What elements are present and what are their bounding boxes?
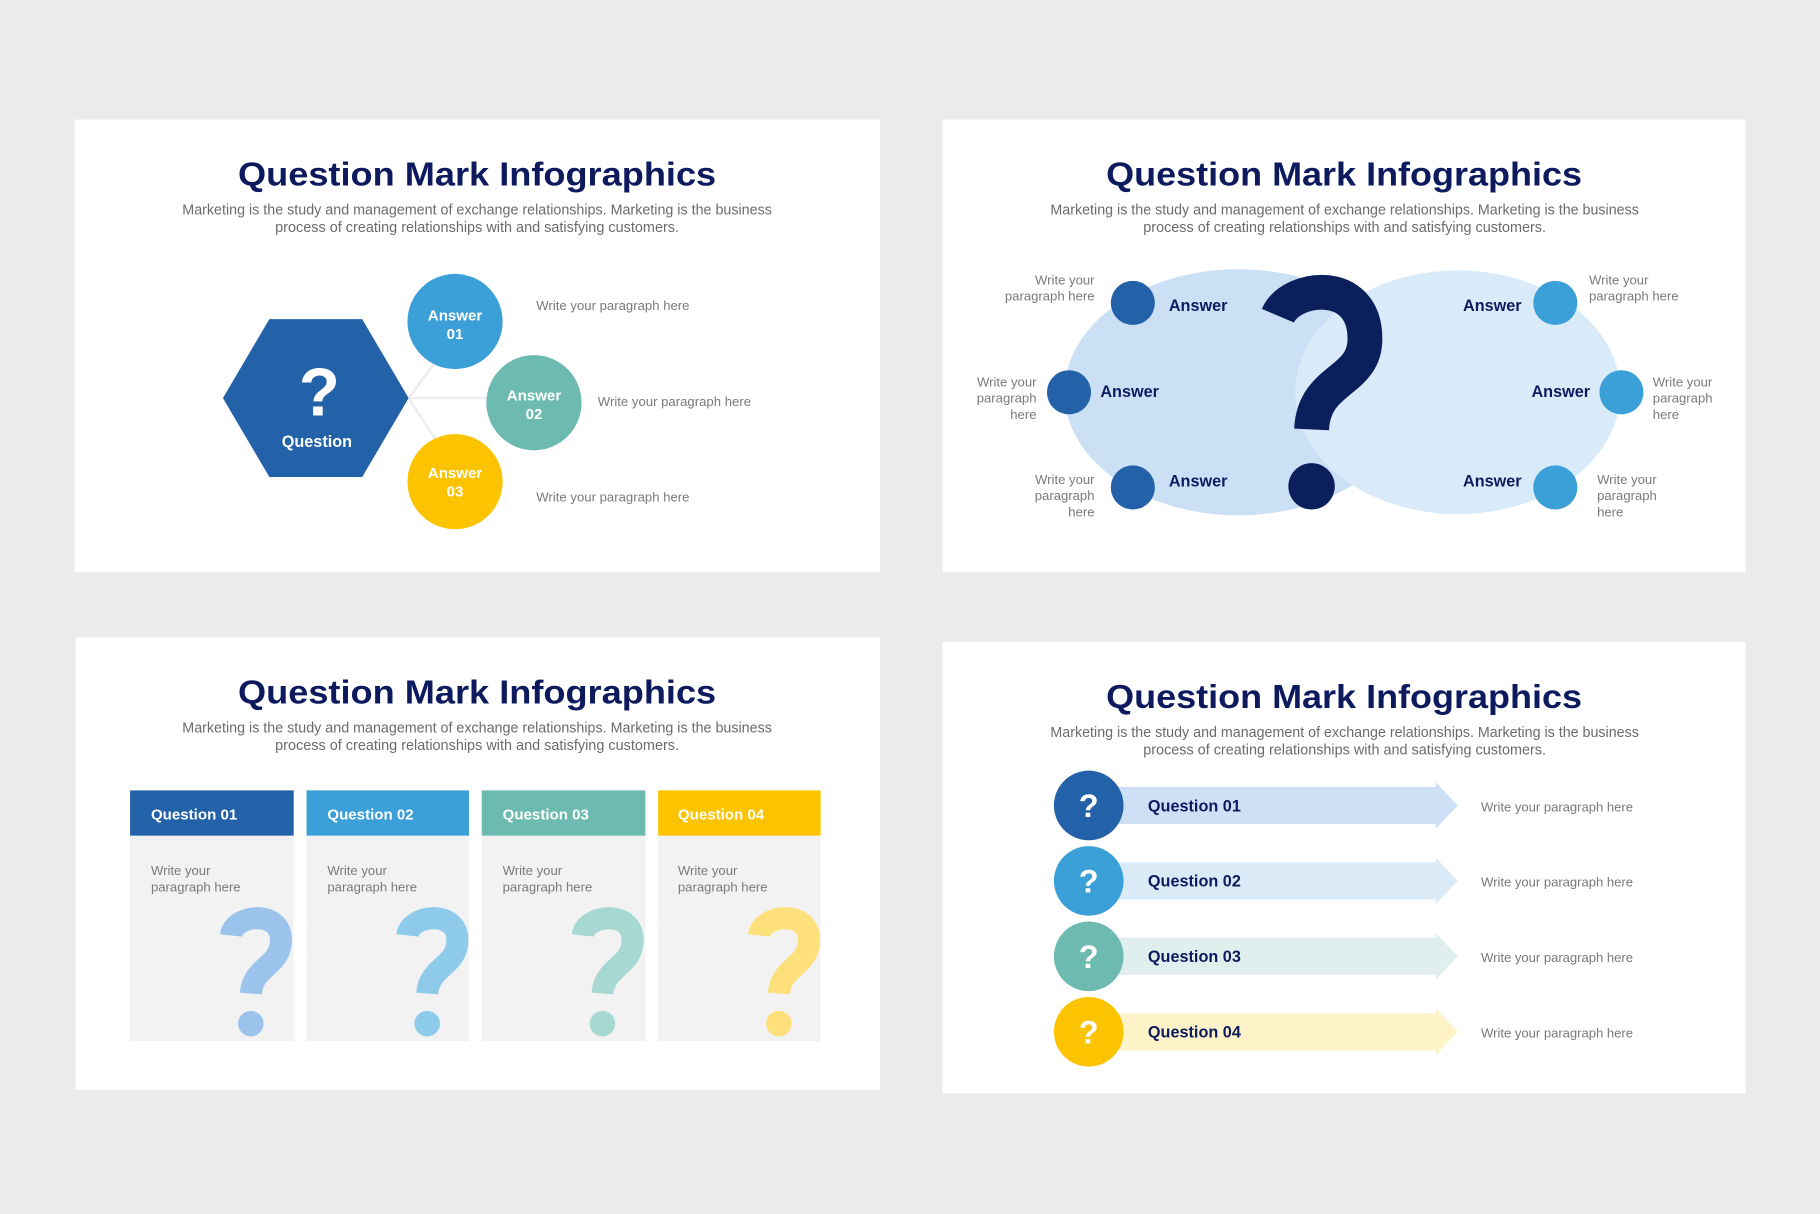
right answers: Write your bbox=[1597, 472, 1657, 487]
column: question 04: paragraph here bbox=[678, 879, 768, 894]
column: question 01: paragraph here bbox=[151, 879, 241, 894]
subtitle bbox=[1050, 725, 1639, 758]
circle: answer 03: 03 bbox=[447, 484, 463, 501]
subtitle: Marketing is the study and management of exchange relationships. Marketing is the business bbox=[182, 203, 772, 219]
row: question 02: ? bbox=[1079, 864, 1099, 900]
right answers: here bbox=[1653, 407, 1679, 422]
right answers: here bbox=[1597, 504, 1623, 519]
right answers: Write your bbox=[1589, 272, 1649, 287]
column: question 03: paragraph here bbox=[503, 879, 592, 894]
column: question 01: Write your bbox=[151, 863, 211, 878]
column: question 04 bbox=[658, 790, 821, 1041]
left answers bbox=[977, 272, 1228, 519]
circle: answer 01: 01 bbox=[447, 326, 463, 343]
row: question 04 bbox=[1054, 997, 1633, 1067]
left answers: here bbox=[1068, 504, 1095, 519]
subtitle: Marketing is the study and management of exchange relationships. Marketing is the business bbox=[182, 720, 772, 736]
left answers: Answer bbox=[1169, 472, 1228, 490]
panel: question arrows bbox=[942, 642, 1746, 1093]
right answers bbox=[1463, 272, 1713, 519]
left answers: paragraph here bbox=[1005, 289, 1095, 304]
circle: answer 03: Answer bbox=[428, 465, 482, 482]
circle: answer 03 bbox=[407, 434, 503, 529]
column: question 02: Write your bbox=[327, 863, 387, 878]
row: question 03: Write your paragraph here bbox=[1481, 950, 1633, 965]
answer paragraphs: Write your paragraph here bbox=[536, 298, 689, 313]
panel: hexagon question bbox=[74, 120, 880, 572]
column: question 02: Question 02 bbox=[327, 806, 414, 823]
circle: answer 02 bbox=[486, 355, 582, 450]
title: Question Mark Infographics bbox=[238, 157, 716, 194]
answer paragraphs bbox=[536, 298, 751, 504]
hexagon: question bbox=[223, 319, 409, 477]
right answers: Write your bbox=[1653, 374, 1713, 389]
column: question 04: Question 04 bbox=[678, 806, 765, 823]
column: question 04: Write your bbox=[678, 863, 738, 878]
right answers: Answer bbox=[1463, 297, 1522, 315]
subtitle bbox=[1050, 203, 1639, 236]
right answers: Answer bbox=[1531, 383, 1591, 401]
row: question 04: Write your paragraph here bbox=[1481, 1026, 1633, 1041]
subtitle bbox=[182, 720, 772, 754]
left answers: Answer bbox=[1169, 297, 1228, 315]
title: Question Mark Infographics bbox=[238, 674, 716, 711]
row: question 03 bbox=[1054, 922, 1633, 991]
connector lines bbox=[409, 362, 488, 439]
column: question 02 bbox=[306, 790, 469, 1041]
hexagon: question: ? bbox=[299, 355, 340, 430]
subtitle: process of creating relationships with and satisfying customers. bbox=[1143, 742, 1546, 758]
row: question 02 bbox=[1054, 846, 1633, 916]
row: question 01 bbox=[1054, 771, 1633, 840]
answer paragraphs: Write your paragraph here bbox=[598, 394, 751, 409]
left answers: Write your bbox=[1035, 472, 1095, 487]
subtitle: process of creating relationships with and satisfying customers. bbox=[1143, 220, 1546, 236]
row: question 03: ? bbox=[1079, 939, 1099, 975]
subtitle: Marketing is the study and management of exchange relationships. Marketing is the business bbox=[1050, 725, 1639, 741]
subtitle: process of creating relationships with and satisfying customers. bbox=[275, 738, 679, 754]
subtitle bbox=[182, 203, 772, 236]
panel: venn question bbox=[942, 120, 1746, 572]
row: question 02: Question 02 bbox=[1148, 873, 1241, 891]
column: question 01 bbox=[130, 790, 294, 1041]
row: question 01: ? bbox=[1079, 788, 1099, 824]
right answers: paragraph bbox=[1597, 488, 1657, 503]
column: question 01: Question 01 bbox=[151, 806, 237, 823]
ellipses bbox=[1064, 269, 1620, 515]
icon: big question mark bbox=[1278, 292, 1365, 510]
circle: answer 01: Answer bbox=[428, 307, 482, 324]
row: question 04: ? bbox=[1079, 1014, 1099, 1050]
left answers: here bbox=[1010, 407, 1037, 422]
circle: answer 02: Answer bbox=[507, 387, 561, 404]
right answers: paragraph bbox=[1653, 391, 1713, 406]
title: Question Mark Infographics bbox=[1106, 157, 1582, 194]
answer paragraphs: Write your paragraph here bbox=[536, 489, 689, 504]
row: question 01: Write your paragraph here bbox=[1481, 799, 1633, 814]
circle: answer 01 bbox=[407, 274, 503, 369]
column: question 03: Write your bbox=[503, 863, 563, 878]
circle: answer 02: 02 bbox=[526, 406, 542, 423]
subtitle: process of creating relationships with and satisfying customers. bbox=[275, 220, 679, 236]
hexagon: question: Question bbox=[282, 433, 352, 451]
left answers: Answer bbox=[1100, 383, 1160, 401]
row: question 04: Question 04 bbox=[1148, 1024, 1241, 1042]
panel: question columns bbox=[76, 637, 880, 1090]
title: Question Mark Infographics bbox=[1106, 679, 1582, 716]
subtitle: Marketing is the study and management of exchange relationships. Marketing is the business bbox=[1050, 203, 1639, 219]
left answers: paragraph bbox=[977, 391, 1037, 406]
left answers: Write your bbox=[1035, 272, 1095, 287]
left answers: Write your bbox=[977, 374, 1037, 389]
right answers: paragraph here bbox=[1589, 289, 1679, 304]
right answers: Answer bbox=[1463, 472, 1522, 490]
column: question 02: paragraph here bbox=[327, 879, 417, 894]
column: question 03: Question 03 bbox=[503, 806, 589, 823]
row: question 03: Question 03 bbox=[1148, 948, 1241, 966]
column: question 03 bbox=[482, 790, 645, 1041]
left answers: paragraph bbox=[1035, 488, 1095, 503]
row: question 01: Question 01 bbox=[1148, 797, 1241, 815]
row: question 02: Write your paragraph here bbox=[1481, 875, 1633, 890]
